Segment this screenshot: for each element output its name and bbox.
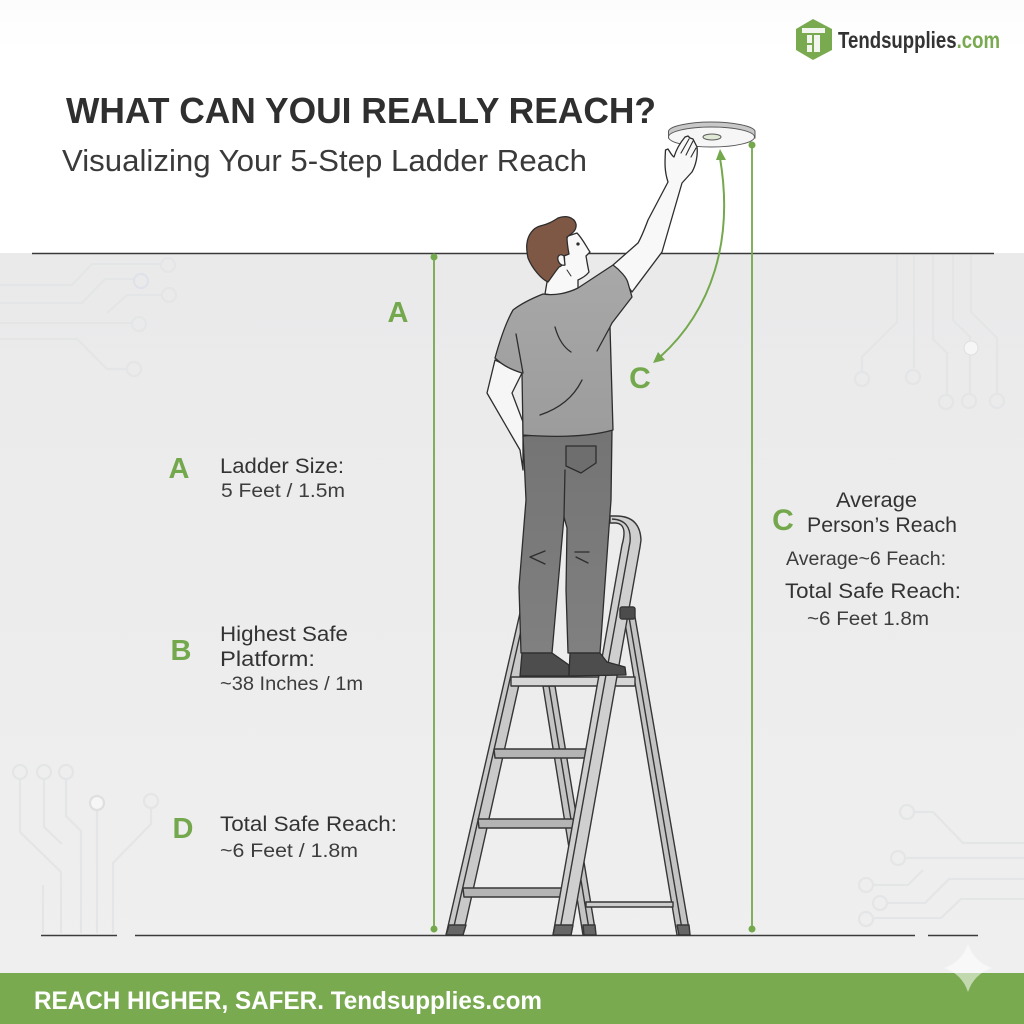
info block: D total safe reach xyxy=(173,813,397,862)
logo xyxy=(796,19,1000,60)
info block: C average person's reach: C xyxy=(772,504,794,537)
ladder platform xyxy=(511,677,635,686)
info block: A ladder size: A xyxy=(169,453,190,485)
footer band: REACH HIGHER, SAFER. Tendsupplies.com xyxy=(34,987,542,1015)
ladder hinge bracket xyxy=(620,607,635,619)
shirt xyxy=(495,265,632,436)
lowered arm xyxy=(487,360,523,470)
info block: B highest safe platform xyxy=(171,623,363,695)
icon: logo hexagon xyxy=(796,19,832,60)
arrow: curved reach arrow xyxy=(653,149,726,363)
info block: C average person's reach xyxy=(772,489,961,630)
subtitle: Visualizing Your 5-Step Ladder Reach xyxy=(62,143,587,178)
label A on line: A xyxy=(388,297,409,329)
info block: A ladder size: Ladder Size: xyxy=(220,455,344,478)
info block: A ladder size xyxy=(169,453,345,502)
info block: A ladder size: 5 Feet / 1.5m xyxy=(221,481,345,502)
title: WHAT CAN YOUI REALLY REACH? xyxy=(66,90,656,131)
circuit pattern: lower left xyxy=(13,765,158,933)
info block: B highest safe platform: Platform: xyxy=(220,648,315,671)
ladder rear rail xyxy=(624,617,690,935)
label C by arrow: C xyxy=(629,362,651,395)
ladder steps xyxy=(463,749,587,897)
raised arm and hand xyxy=(613,136,697,292)
info block: C average person's reach: Total Safe Reach: xyxy=(785,580,961,603)
person xyxy=(487,136,697,676)
ladder front right rail with hoop xyxy=(553,516,641,935)
info block: D total safe reach: Total Safe Reach: xyxy=(220,813,397,836)
info block: B highest safe platform: Highest Safe xyxy=(220,623,348,646)
background: lower grey wall xyxy=(0,253,1024,973)
shoes xyxy=(520,653,626,676)
info block: B highest safe platform: B xyxy=(171,635,191,667)
ladder lower brace xyxy=(586,902,673,907)
pants xyxy=(519,430,612,653)
ceiling light xyxy=(668,122,755,147)
dimension line A xyxy=(430,254,438,932)
circuit pattern: upper left xyxy=(0,258,176,376)
floor line xyxy=(41,934,978,936)
info block: C average person's reach: Average xyxy=(836,489,917,512)
ladder xyxy=(446,516,690,935)
info block: D total safe reach: D xyxy=(173,813,193,845)
circuit pattern: upper right xyxy=(855,255,1004,409)
ladder back rail xyxy=(543,686,596,935)
ceiling line xyxy=(32,252,994,254)
info block: B highest safe platform: ~38 Inches / 1m xyxy=(220,674,363,695)
neck and face xyxy=(545,233,590,296)
circuit pattern: lower right xyxy=(859,805,1024,926)
icon: sparkle xyxy=(944,944,992,992)
ladder front left rail xyxy=(446,613,535,935)
hair xyxy=(527,217,576,282)
info block: C average person's reach: Person’s Reach xyxy=(807,514,957,537)
info block: D total safe reach: ~6 Feet / 1.8m xyxy=(220,841,358,862)
logo text: Tendsupplies.com xyxy=(838,27,1000,53)
footer band xyxy=(0,973,1024,1024)
info block: C average person's reach: Average~6 Feach: xyxy=(786,549,946,570)
dimension line C xyxy=(748,142,756,932)
ear xyxy=(558,255,565,265)
info block: C average person's reach: ~6 Feet 1.8m xyxy=(807,609,929,630)
background: upper white wall xyxy=(0,0,1024,253)
